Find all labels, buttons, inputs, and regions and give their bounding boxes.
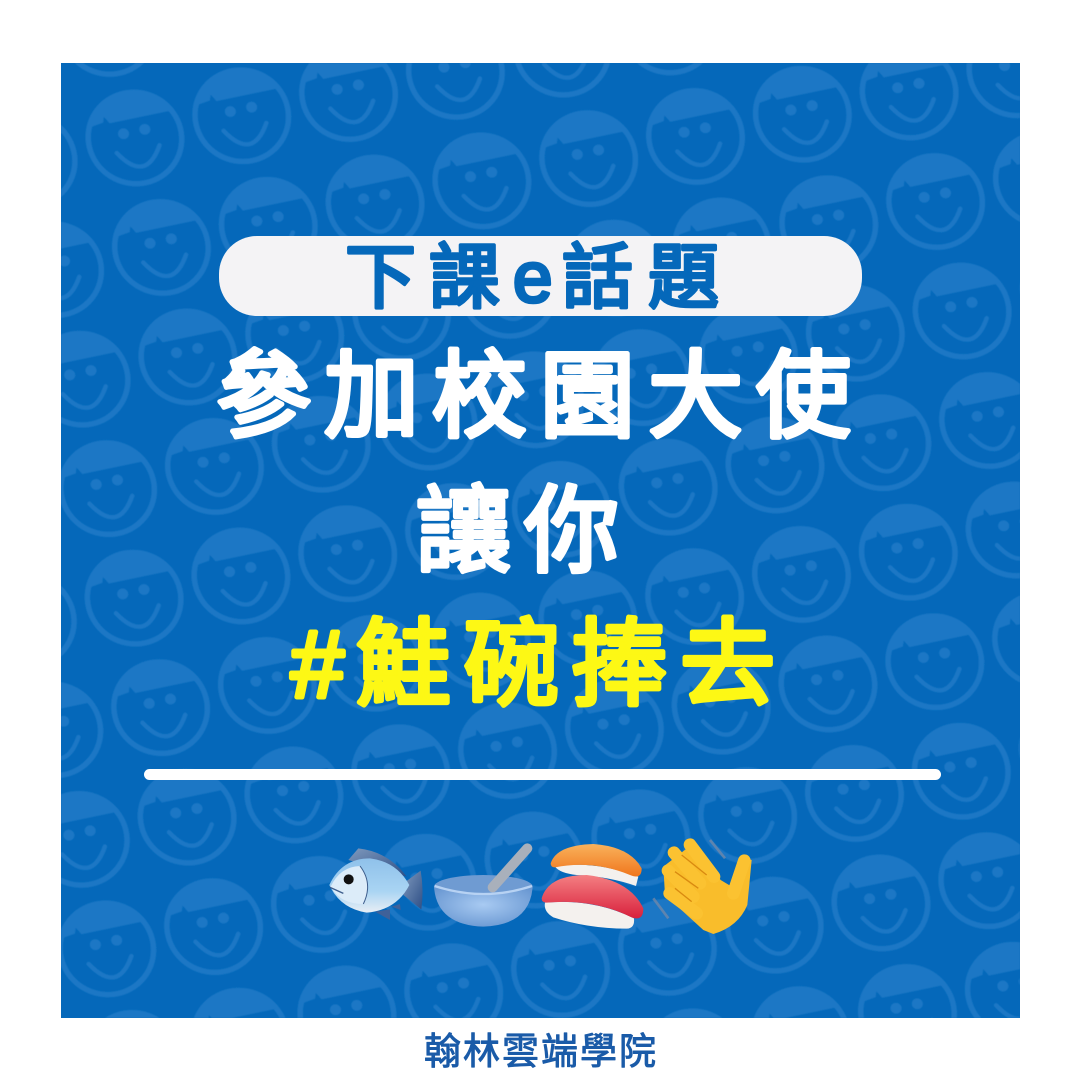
- background panel with smiling face pattern: [61, 63, 1020, 1018]
- white divider bar: [144, 769, 941, 780]
- footer logo text: 翰林雲端學院: 翰林雲端學院: [424, 1031, 658, 1072]
- title line: 參加校園大使: 參加校園大使: [216, 344, 851, 450]
- icon: sushi: [542, 844, 643, 929]
- heading pill: 下課e話題: [219, 236, 862, 318]
- icon: waving hand: [653, 840, 752, 934]
- title line: 讓你: 讓你: [416, 479, 619, 585]
- icon: fish: [329, 848, 423, 920]
- hashtag line: #鮭碗捧去: #鮭碗捧去: [291, 612, 775, 718]
- emoji row: [329, 840, 752, 934]
- heading pill: 下課e話題: 下課e話題: [345, 239, 719, 318]
- icon: mixing bowl with spoon: [434, 848, 533, 927]
